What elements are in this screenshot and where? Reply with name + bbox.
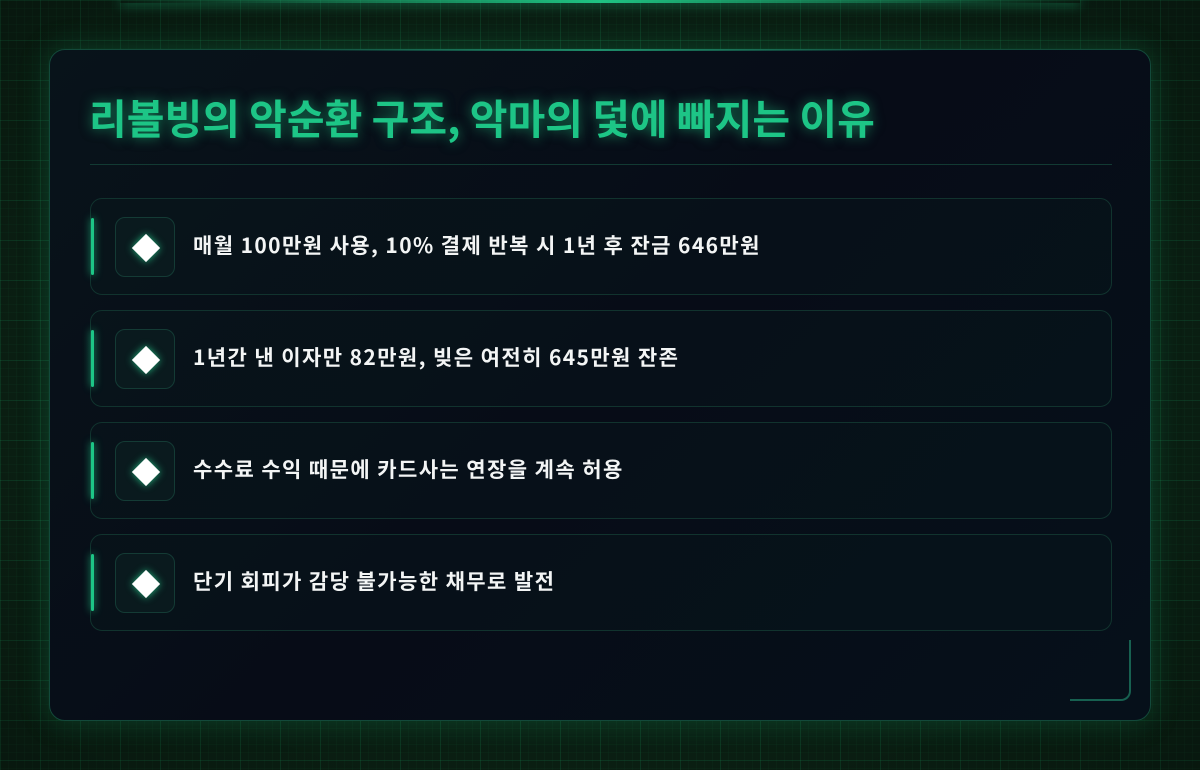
- text 3: 수수료 수익 때문에 카드사는 연장을 계속 허용: [193, 454, 624, 484]
- icon: diamond: [115, 329, 175, 389]
- item 4: [90, 534, 1112, 631]
- text 1: 매월 100만원 사용, 10% 결제 반복 시 1년 후 잔금 646만원: [193, 230, 761, 260]
- icon: diamond: [115, 217, 175, 277]
- text 4: 단기 회피가 감당 불가능한 채무로 발전: [193, 566, 555, 596]
- icon: diamond: [115, 553, 175, 613]
- title: 리볼빙의 악순환 구조, 악마의 덫에 빠지는 이유: [89, 86, 875, 146]
- item 2: [90, 310, 1112, 407]
- icon: diamond: [115, 441, 175, 501]
- corner bracket: [1070, 640, 1131, 701]
- item 3: [90, 422, 1112, 519]
- item 1: [90, 198, 1112, 295]
- text 2: 1년간 낸 이자만 82만원, 빚은 여전히 645만원 잔존: [193, 342, 679, 372]
